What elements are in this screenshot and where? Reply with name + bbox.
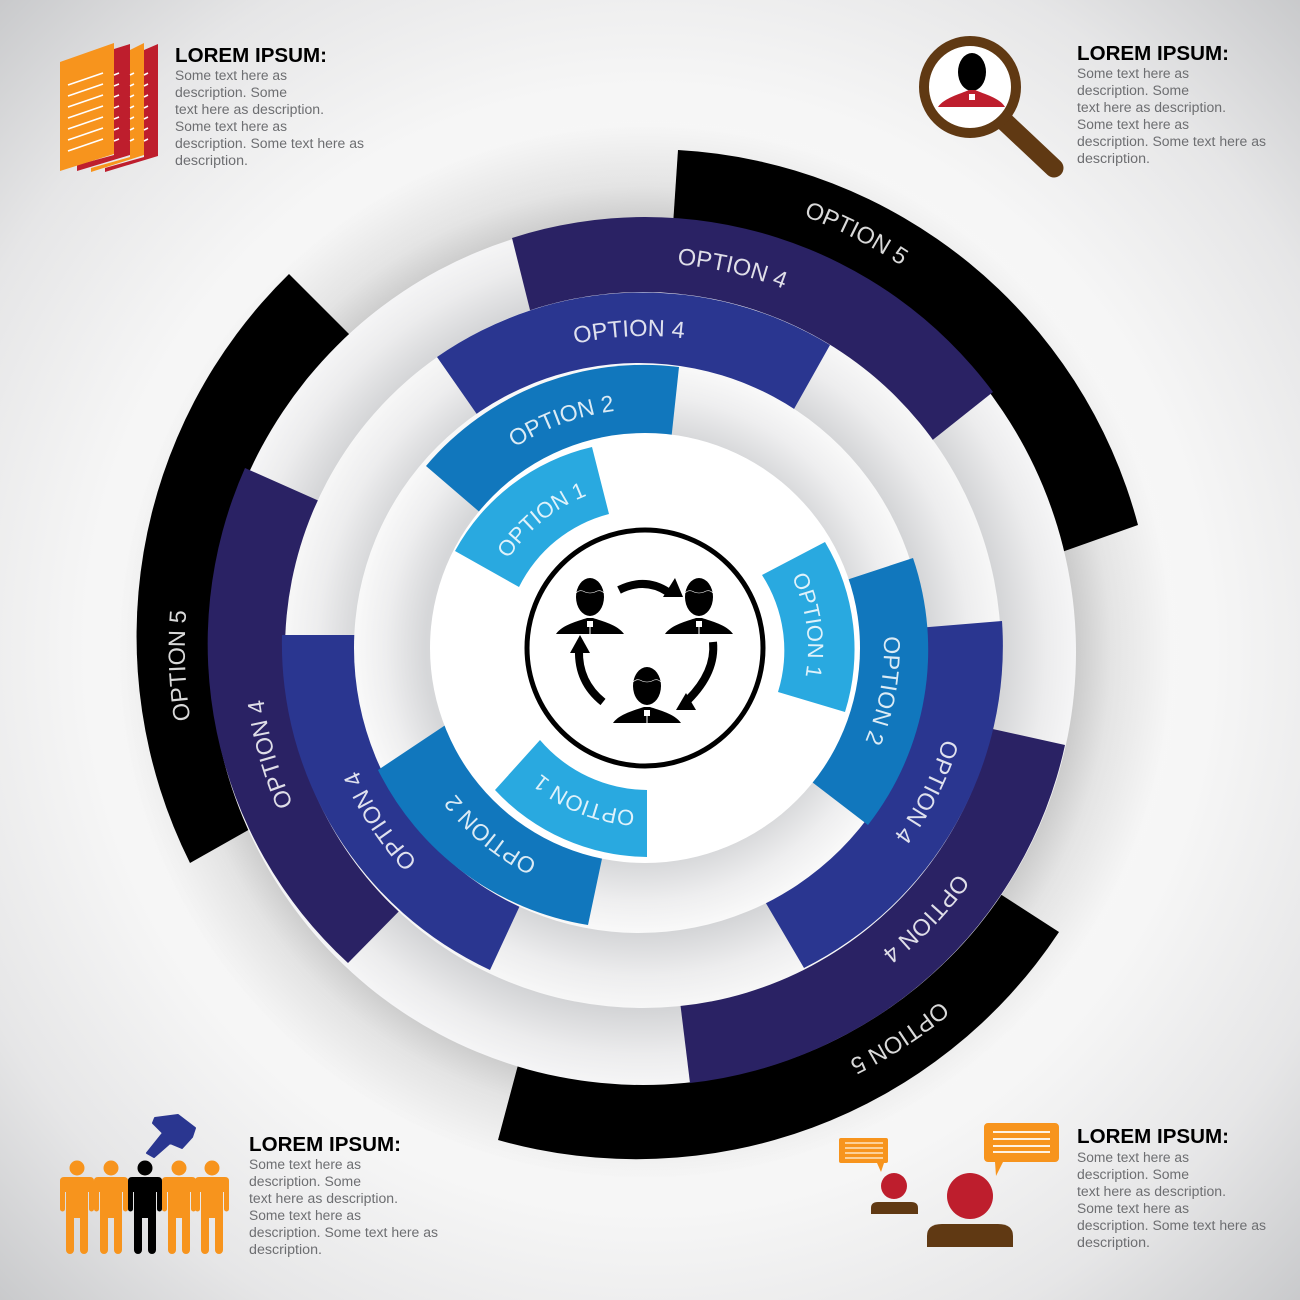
bottom-left text block: Some text here as <box>249 1208 361 1223</box>
bottom-right text block <box>1077 1126 1266 1250</box>
top-right text block: description. Some text here as <box>1077 134 1266 149</box>
top-left text block: text here as description. <box>175 102 324 117</box>
top-right text block: description. Some <box>1077 83 1189 98</box>
second shaded disc <box>354 363 924 933</box>
third shaded disc <box>285 292 1001 1008</box>
soft shadow around the outer disc <box>115 122 1175 1182</box>
top-right: magnifying glass with person icon <box>924 41 1054 168</box>
top-left text block: LOREM IPSUM: <box>175 45 327 67</box>
outer shaded disc <box>210 219 1076 1085</box>
bottom-left text block: text here as description. <box>249 1191 398 1206</box>
top-left text block: description. Some <box>175 85 287 100</box>
top-right text block <box>1077 43 1266 166</box>
top-left text block: Some text here as <box>175 119 287 134</box>
option labels <box>168 203 968 1074</box>
top-right text block: Some text here as <box>1077 66 1189 81</box>
option labels: OPTION 4 <box>884 876 968 962</box>
ring 2: mid blue segments <box>378 365 928 925</box>
option labels: OPTION 4 <box>679 248 786 288</box>
option labels: OPTION 1 <box>499 483 586 556</box>
bottom-right text block: description. <box>1077 1235 1150 1250</box>
inner white disc <box>430 433 860 863</box>
top-left text block <box>175 45 364 168</box>
option labels: OPTION 5 <box>806 203 908 264</box>
bottom-right text block: Some text here as <box>1077 1150 1189 1165</box>
ring 1: light blue segments <box>455 447 855 857</box>
bottom-left text block: description. Some <box>249 1174 361 1189</box>
bottom-right text block: description. Some <box>1077 1167 1189 1182</box>
bottom-right text block: description. Some text here as <box>1077 1218 1266 1233</box>
option labels: OPTION 5 <box>168 611 190 720</box>
bottom-left text block: description. Some text here as <box>249 1225 438 1240</box>
top-left text block: description. Some text here as <box>175 136 364 151</box>
option labels: OPTION 1 <box>794 574 824 676</box>
centre icon: three people exchanging in a circle <box>527 530 763 766</box>
bottom-left: group of people with pointing hand icon <box>60 1115 229 1254</box>
option labels: OPTION 4 <box>896 742 957 844</box>
bottom-right text block: text here as description. <box>1077 1184 1226 1199</box>
bottom-left text block: Some text here as <box>249 1157 361 1172</box>
bottom-right text block: LOREM IPSUM: <box>1077 1126 1229 1148</box>
top-right text block: description. <box>1077 151 1150 166</box>
option labels: OPTION 1 <box>536 774 634 826</box>
top-right text block: LOREM IPSUM: <box>1077 43 1229 65</box>
option labels: OPTION 5 <box>851 1004 948 1074</box>
ring 3: blue segments <box>282 292 1003 970</box>
top-left: document icon <box>60 43 158 172</box>
option labels: OPTION 4 <box>344 772 414 869</box>
option labels: OPTION 4 <box>574 320 684 342</box>
top-left text block: Some text here as <box>175 68 287 83</box>
ring 4: dark indigo segments <box>208 217 1065 1083</box>
bottom-left text block: description. <box>249 1242 322 1257</box>
top-right text block: Some text here as <box>1077 117 1189 132</box>
bottom-left text block <box>249 1134 438 1257</box>
ring 5: black segments <box>137 150 1138 1159</box>
top-right text block: text here as description. <box>1077 100 1226 115</box>
option labels: OPTION 2 <box>866 637 900 745</box>
option labels: OPTION 2 <box>510 396 614 444</box>
option labels: OPTION 2 <box>445 794 534 873</box>
bottom-left text block: LOREM IPSUM: <box>249 1134 401 1156</box>
bottom-right text block: Some text here as <box>1077 1201 1189 1216</box>
option labels: OPTION 4 <box>248 700 291 808</box>
bottom-right: two people talking with speech bubbles icon <box>839 1123 1059 1247</box>
top-left text block: description. <box>175 153 248 168</box>
